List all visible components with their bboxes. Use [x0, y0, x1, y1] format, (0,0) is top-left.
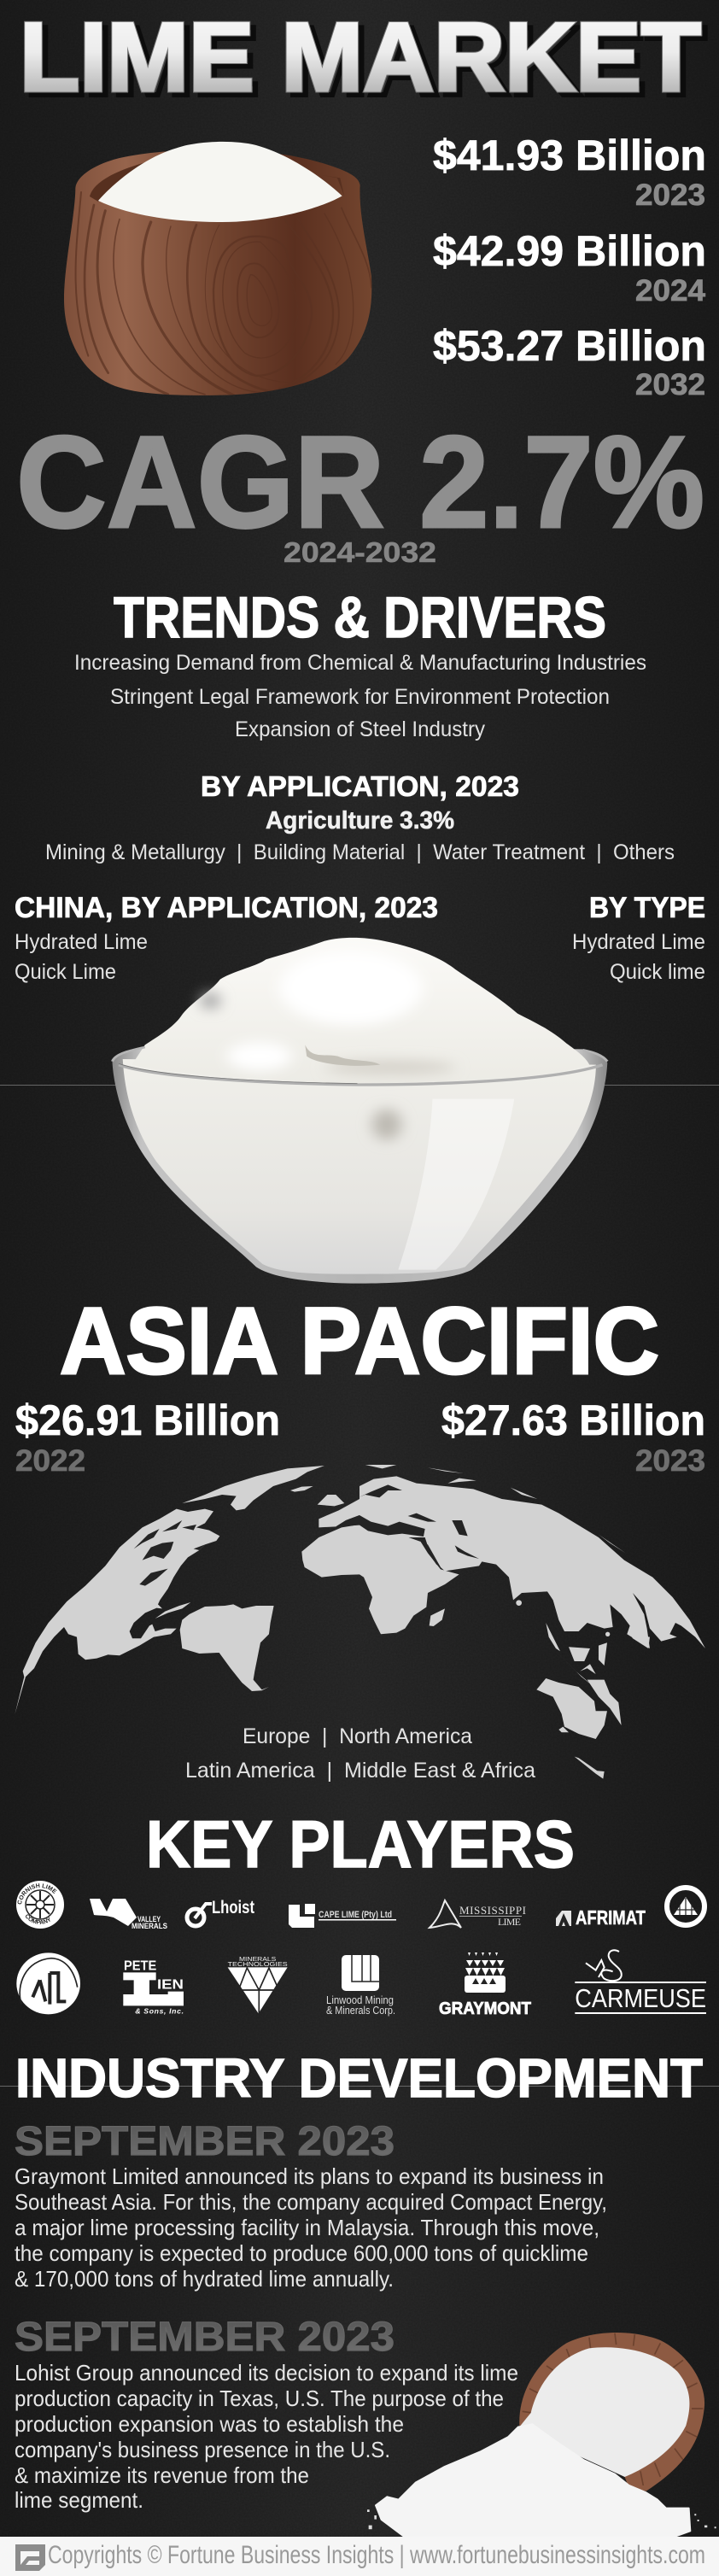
other regions list: Latin America | Middle East & Africa — [185, 1759, 535, 1783]
logo: Carmeuse: CARMEUSE — [575, 1984, 706, 2013]
logo: arched circle mark — [16, 1952, 80, 2014]
by application block — [45, 770, 675, 864]
development 2 text: lime segment. — [15, 2487, 143, 2513]
logo: United States Lime — [667, 1888, 704, 1925]
market value 2032 — [433, 322, 706, 401]
market value 2032: 2032 — [635, 368, 705, 401]
logo: Valley Minerals: VALLEY — [137, 1915, 161, 1923]
icon: wooden bowl of lime — [64, 142, 371, 395]
market value 2032: $53.27 Billion — [433, 322, 706, 370]
market value 2023: 2023 — [635, 179, 705, 212]
logo: Afrimat — [556, 1906, 646, 1929]
logo: Cornish Lime: COMPANY — [26, 1914, 50, 1924]
development 1 text: the company is expected to produce 600,000 tons of quicklime — [15, 2240, 588, 2266]
logo: Valley Minerals: MINERALS — [132, 1922, 167, 1930]
development 2 date: SEPTEMBER 2023 — [15, 2315, 395, 2360]
logo: Carmeuse — [575, 1950, 706, 2014]
development 1 text: Graymont Limited announced its plans to expand its business in — [15, 2163, 604, 2189]
logo: Pete Lien: PETE — [124, 1959, 157, 1974]
drivers list — [74, 651, 646, 741]
logo: Cornish Lime — [16, 1881, 64, 1929]
logo: Mississippi Lime — [430, 1900, 526, 1928]
logo: Graymont — [439, 1952, 531, 2018]
logo: Cornish Lime: CORNISH LIME — [17, 1883, 57, 1905]
logo: Graymont: GRAYMONT — [439, 1999, 531, 2018]
development 2 text: & maximize its revenue from the — [15, 2462, 309, 2488]
development 2 text — [15, 2360, 518, 2513]
development 1 text: a major lime processing facility in Malaysia. Through this move, — [15, 2215, 599, 2240]
logo: Minerals Technologies: TECHNOLOGIES — [228, 1960, 288, 1968]
market value 2024: $42.99 Billion — [433, 227, 706, 275]
logo: Lhoist: Lhoist — [212, 1898, 254, 1917]
logo: Afrimat: AFRIMAT — [576, 1906, 646, 1929]
regional value 2022: 2022 — [15, 1444, 85, 1478]
China by application: Hydrated Lime — [15, 930, 148, 954]
logo: Linwood Mining: & Minerals Corp. — [326, 2004, 395, 2017]
title: LIME MARKET — [20, 3, 701, 112]
logo: Minerals Technologies: MINERALS — [239, 1955, 276, 1963]
heading: Asia Pacific: ASIA PACIFIC — [60, 1289, 659, 1394]
icon: Fortune Business Insights logo — [15, 2544, 45, 2571]
by application block: Agriculture 3.3% — [266, 807, 454, 834]
logo: Minerals Technologies — [228, 1955, 288, 2013]
title: LIME MARKET — [25, 8, 706, 116]
heading: industry development: INDUSTRY DEVELOPMENT — [15, 2047, 703, 2109]
regional value 2023 — [441, 1396, 705, 1478]
development 1 text: & 170,000 tons of hydrated lime annually. — [15, 2266, 394, 2292]
logo: Mississippi Lime: MISSISSIPPI — [459, 1904, 526, 1917]
development 1 date: SEPTEMBER 2023 — [15, 2119, 395, 2164]
regional value 2022: $26.91 Billion — [15, 1396, 280, 1444]
by application block: BY APPLICATION, 2023 — [201, 770, 519, 802]
logo: Pete Lien: IEN — [157, 1978, 184, 1993]
logo: Valley Minerals — [90, 1899, 167, 1930]
development 1 text: Southeast Asia. For this, the company acquired Compact Energy, — [15, 2189, 607, 2215]
by type: Hydrated Lime — [572, 930, 705, 954]
CAGR headline: CAGR 2.7% — [16, 409, 704, 555]
logo: Pete Lien: & Sons, Inc. — [135, 2007, 184, 2016]
heading: key players: KEY PLAYERS — [146, 1806, 575, 1882]
logo: Linwood Mining: Linwood Mining — [326, 1993, 394, 2006]
logo: Lhoist — [187, 1898, 254, 1926]
title: LIME MARKET — [20, 3, 701, 112]
icon: spilled lime and wooden bowl — [367, 2333, 716, 2537]
world map — [15, 1465, 705, 1779]
other regions list: Europe | North America — [243, 1724, 472, 1748]
icon: glass bowl of lime — [112, 938, 607, 1284]
China by application — [15, 892, 438, 984]
market value 2023 — [433, 132, 706, 212]
drivers list: Stringent Legal Framework for Environment Protection — [110, 685, 610, 709]
other regions list — [185, 1724, 535, 1783]
logo: Linwood Mining — [326, 1955, 395, 2017]
by type: Quick lime — [610, 960, 705, 984]
drivers list: Increasing Demand from Chemical & Manufacturing Industries — [74, 651, 646, 675]
map: the Americas and Greenland — [15, 1466, 344, 1714]
footer band — [0, 2537, 719, 2576]
by type — [572, 892, 705, 984]
logo: Mississippi Lime: LIME — [498, 1916, 521, 1928]
heading: trends and drivers: TRENDS & DRIVERS — [114, 585, 606, 650]
regional value 2023: 2023 — [635, 1444, 705, 1478]
development 2 text: Lohist Group announced its decision to expand its lime — [15, 2360, 518, 2386]
by application block: Mining & Metallurgy | Building Material | Water Treatment | Others — [45, 840, 675, 864]
market value 2024: 2024 — [635, 274, 706, 307]
logo: Pete Lien — [123, 1959, 184, 2016]
map: Europe, Asia, Africa and Oceania — [301, 1465, 705, 1779]
development 2 text: company's business presence in the U.S. — [15, 2437, 390, 2462]
development 2 text: production expansion was to establish the — [15, 2411, 404, 2437]
CAGR headline: 2024-2032 — [284, 536, 436, 568]
drivers list: Expansion of Steel Industry — [235, 717, 485, 741]
market value 2023: $41.93 Billion — [433, 132, 706, 179]
logo: Cape Lime: CAPE LIME (Pty) Ltd — [319, 1910, 392, 1920]
by type: BY TYPE — [589, 892, 705, 924]
development 2 text: production capacity in Texas, U.S. The purpose of the — [15, 2386, 504, 2411]
regional value 2022 — [15, 1396, 280, 1478]
China by application: Quick Lime — [15, 960, 116, 984]
regional value 2023: $27.63 Billion — [441, 1396, 705, 1444]
China by application: CHINA, BY APPLICATION, 2023 — [15, 892, 438, 924]
market value 2024 — [433, 227, 706, 307]
logo: Cape Lime — [289, 1904, 396, 1928]
development 1 text — [15, 2163, 607, 2292]
